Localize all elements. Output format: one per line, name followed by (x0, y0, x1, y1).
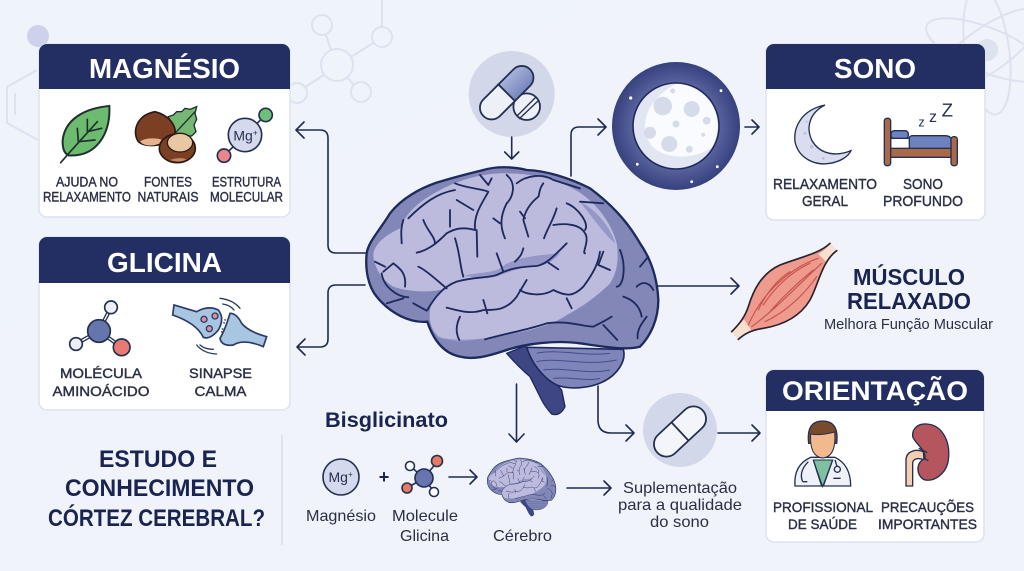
panel: sono (766, 44, 985, 220)
panel: magnésio (39, 44, 290, 217)
icon: magnesium circle: + (348, 470, 353, 479)
label: relaxamento geral: RELAXAMENTO (773, 176, 877, 193)
label: ajuda no relaxamento: RELAXAMENTO (43, 189, 131, 205)
illustration: brain (366, 167, 658, 415)
label: suplementação: do sono (650, 514, 709, 531)
heading: magnésio: MAGNÉSIO (89, 53, 240, 84)
icon: doctor (795, 421, 851, 487)
icon: small brain (487, 458, 556, 516)
label: molécula aminoácido: MOLÉCULA (60, 365, 143, 381)
subtext: melhora função muscular: Melhora Função Muscular (824, 317, 993, 333)
label: precauções importantes: IMPORTANTES (878, 516, 977, 532)
icon: glycine molecule (402, 456, 442, 496)
icon: magnesium circle (323, 459, 359, 495)
heading: músculo relaxado (824, 263, 993, 333)
heading: bisglicinato: Bisglicinato (325, 409, 448, 432)
label: sono profundo: PROFUNDO (883, 193, 963, 210)
icon: chestnuts (136, 107, 197, 163)
label: cérebro: Cérebro (493, 528, 552, 545)
icon: crescent moon (795, 105, 851, 164)
icon: magnesium molecule: Mg (233, 128, 253, 144)
label: profissional de saúde: DE SAÚDE (788, 516, 857, 532)
heading: músculo relaxado: RELAXADO (847, 288, 971, 314)
heading: estudo e conhecimento: CÓRTEZ CEREBRAL? (48, 504, 265, 532)
heading: sono: SONO (834, 53, 916, 84)
arrows: connectors (296, 119, 760, 495)
label: sinapse calma: CALMA (194, 383, 247, 399)
label: molecule glicina: Glicina (400, 528, 449, 545)
background atom decoration (918, 0, 1024, 117)
label: ajuda no relaxamento: AJUDA NO (56, 174, 118, 190)
section: bisglicinato formula (306, 409, 742, 545)
icon: leaf (61, 106, 109, 163)
label: sinapse calma: SINAPSE (189, 365, 252, 381)
label: fontes naturais: FONTES (144, 174, 192, 190)
label: suplementação: Suplementação (623, 480, 737, 497)
cerebellum (527, 347, 624, 388)
icon: synapse (173, 298, 267, 354)
label: molecule glicina: Molecule (392, 508, 458, 525)
background molecule decoration (7, 0, 392, 140)
heading: glicina: GLICINA (107, 247, 222, 278)
panel: glicina (39, 237, 290, 410)
label: suplementação: para a qualidade (618, 497, 742, 514)
heading: orientação: ORIENTAÇÃO (782, 375, 968, 406)
label: fontes naturais: NATURAIS (138, 189, 198, 205)
plus sign: + (379, 467, 389, 487)
icon: bed with zzz: Z (942, 100, 953, 121)
panel: orientação (766, 370, 984, 542)
heading: músculo relaxado: MÚSCULO (853, 263, 965, 290)
heading: estudo e conhecimento: ESTUDO E (99, 446, 217, 473)
label: estrutura molecular: MOLECULAR (210, 189, 283, 205)
icon: magnesium molecule (217, 108, 272, 162)
icon: bed with zzz: z (918, 116, 925, 130)
heading: estudo e conhecimento: CONHECIMENTO (65, 475, 254, 502)
icon: bed with zzz: z (929, 109, 937, 126)
label: molécula aminoácido: AMINOÁCIDO (52, 383, 150, 399)
icon: lower capsule in circle (643, 393, 717, 467)
label: profissional de saúde: PROFISSIONAL (773, 499, 873, 515)
icon: magnesium molecule: + (253, 127, 258, 137)
cerebrum light lobes (373, 173, 618, 340)
icon: bed with zzz (884, 100, 957, 166)
cerebrum outline (366, 167, 658, 358)
label: relaxamento geral: GERAL (802, 193, 848, 210)
icon: amino acid molecule (70, 301, 130, 356)
cerebrum soft shading (433, 202, 615, 342)
icon: kidney (906, 424, 949, 486)
icon: pills in circle (469, 51, 555, 137)
cerebrum sulci (375, 175, 653, 340)
brain stem (507, 346, 565, 415)
label: estrutura molecular: ESTRUTURA (212, 174, 282, 190)
icon: full moon (612, 62, 740, 190)
icon: magnesium circle: Mg (328, 469, 348, 485)
label: sono profundo: SONO (903, 176, 943, 193)
icon: muscle (732, 243, 837, 339)
divider (281, 435, 283, 545)
label: magnésio: Magnésio (306, 508, 376, 525)
heading: estudo e conhecimento (48, 446, 265, 532)
label: precauções importantes: PRECAUÇÕES (881, 499, 974, 515)
